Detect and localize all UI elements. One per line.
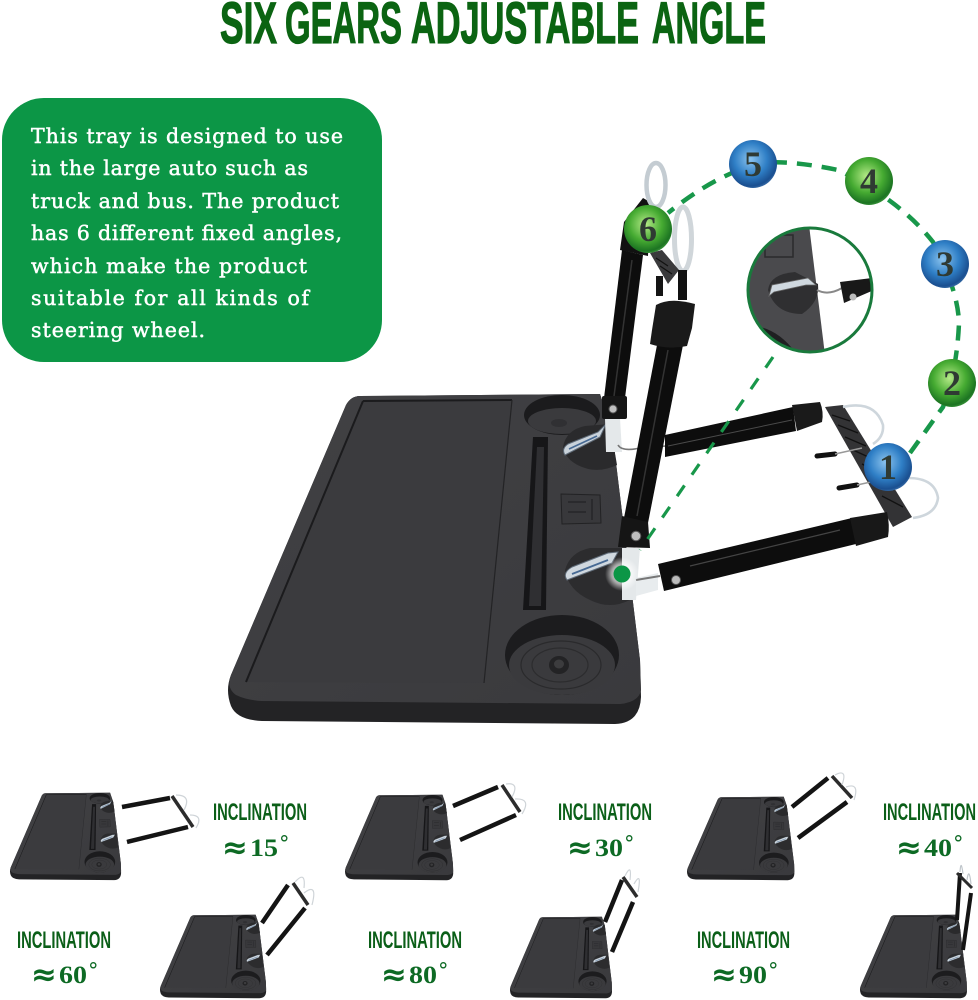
label: inclination 90: 90 — [739, 962, 767, 989]
gear marker 6: 6 — [639, 209, 657, 249]
gear marker 1: 1 — [879, 447, 897, 487]
label: inclination 90: INCLINATION — [697, 927, 790, 954]
label: inclination 80: INCLINATION — [368, 927, 462, 954]
label: inclination 60: ° — [88, 959, 98, 983]
label: inclination 40: ≈ — [896, 830, 922, 866]
thumbnail: 80 degrees — [510, 870, 639, 998]
label: inclination 90 — [697, 927, 790, 993]
label: inclination 15: ° — [279, 832, 290, 856]
panel: description: which make the product — [31, 254, 308, 278]
label: inclination 80: 80 — [409, 962, 437, 989]
label: inclination 30 — [558, 799, 652, 866]
label: inclination 30: ≈ — [567, 830, 593, 866]
gear marker 5 — [729, 140, 777, 188]
label: inclination 80: ° — [438, 959, 448, 983]
dashed line: pivot to inset — [640, 357, 773, 550]
label: inclination 80 — [368, 927, 462, 993]
label: inclination 40: 40 — [924, 835, 952, 862]
gear marker 2 — [928, 359, 976, 407]
panel: description: steering wheel. — [31, 318, 205, 342]
label: inclination 30: INCLINATION — [558, 799, 652, 826]
gear marker 5: 5 — [744, 144, 762, 184]
label: inclination 60: 60 — [59, 962, 87, 989]
panel: description — [2, 98, 382, 362]
thumbnail: 30 degrees — [345, 784, 526, 880]
panel: description: This tray is designed to use — [31, 124, 343, 148]
label: inclination 30: 30 — [595, 835, 623, 862]
thumbnail: 60 degrees — [160, 877, 314, 998]
label: inclination 40: ° — [953, 832, 964, 856]
gear marker 4: 4 — [860, 161, 878, 201]
label: inclination 30: ° — [624, 832, 634, 856]
thumbnail: 90 degrees — [860, 865, 972, 998]
dashed arc: gear positions — [668, 162, 959, 453]
label: inclination 15: ≈ — [222, 830, 248, 866]
title — [220, 0, 766, 56]
inset: hinge close-up — [746, 226, 874, 354]
label: inclination 15: INCLINATION — [213, 799, 307, 826]
main tray arms — [602, 163, 938, 600]
gear marker 4 — [845, 157, 893, 205]
pivot dot — [605, 557, 639, 591]
label: inclination 40 — [883, 799, 976, 866]
panel: description: truck and bus. The product — [31, 189, 340, 213]
thumbnail: 15 degrees — [10, 793, 199, 880]
label: inclination 60 — [17, 927, 111, 993]
label: inclination 15: 15 — [250, 835, 278, 862]
thumbnail: 40 degrees — [687, 773, 856, 880]
panel: description: has 6 different fixed angles, — [31, 221, 342, 245]
gear marker 6 — [624, 205, 672, 253]
main tray — [228, 394, 641, 724]
gear marker 1 — [864, 443, 912, 491]
gear marker 3: 3 — [936, 244, 954, 284]
label: inclination 60: INCLINATION — [17, 927, 111, 954]
label: inclination 90: ° — [768, 959, 778, 983]
label: inclination 60: ≈ — [31, 957, 57, 993]
panel: description: suitable for all kinds of — [31, 286, 310, 310]
label: inclination 80: ≈ — [381, 957, 407, 993]
label: inclination 15 — [213, 799, 307, 866]
label: inclination 90: ≈ — [711, 957, 737, 993]
panel: description: in the large auto such as — [31, 156, 308, 180]
gear marker 2: 2 — [943, 363, 961, 403]
gear marker 3 — [921, 240, 969, 288]
